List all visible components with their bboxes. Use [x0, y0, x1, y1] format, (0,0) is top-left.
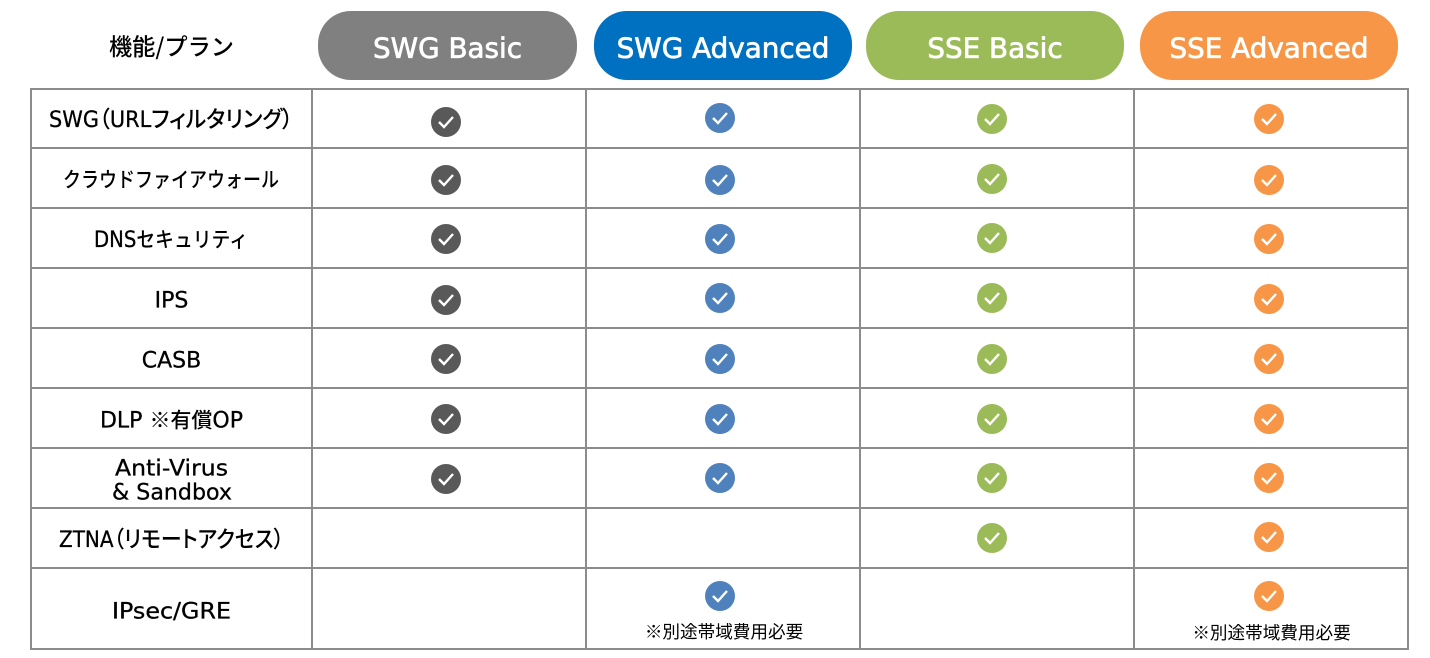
note: SWG Advanced bandwidth: ※別途帯域費用必要 — [645, 619, 803, 644]
SWG Basic checks — [431, 107, 461, 494]
plan pill: SWG Basic — [318, 11, 577, 80]
SWG Advanced checks — [705, 103, 735, 611]
SSE Basic checks — [977, 104, 1007, 553]
row label: cloud firewall: クラウドファイアウォール — [63, 164, 279, 194]
header label: 機能/プラン — [109, 28, 234, 62]
plan pill: SSE Advanced — [1140, 11, 1398, 80]
row label: IPsec/GRE: IPsec/GRE — [112, 600, 231, 624]
plan pill: SSE Basic — [866, 11, 1124, 80]
SSE Advanced checks — [1254, 104, 1284, 611]
plan pill: SWG Advanced: SWG Advanced — [617, 32, 829, 64]
row label: Anti-Virus: Anti-Virus — [115, 456, 228, 482]
row label: DLP: DLP ※有償OP — [100, 404, 243, 434]
row labels — [49, 100, 293, 624]
plan pill: SWG Basic: SWG Basic — [373, 32, 522, 64]
row label: DNS security: DNSセキュリティ — [94, 224, 248, 254]
plan pill: SSE Basic: SSE Basic — [927, 32, 1063, 64]
row label: and Sandbox: & Sandbox — [112, 480, 232, 506]
note: SSE Advanced bandwidth: ※別途帯域費用必要 — [1192, 620, 1351, 645]
row label: CASB: CASB — [142, 348, 201, 374]
plan pill: SWG Advanced — [594, 11, 852, 80]
plan pill: SSE Advanced: SSE Advanced — [1170, 32, 1368, 64]
row label: IPS: IPS — [155, 288, 188, 314]
row label: SWG: SWG（URLフィルタリング） — [49, 100, 293, 134]
row label: ZTNA: ZTNA（リモートアクセス） — [59, 520, 284, 554]
